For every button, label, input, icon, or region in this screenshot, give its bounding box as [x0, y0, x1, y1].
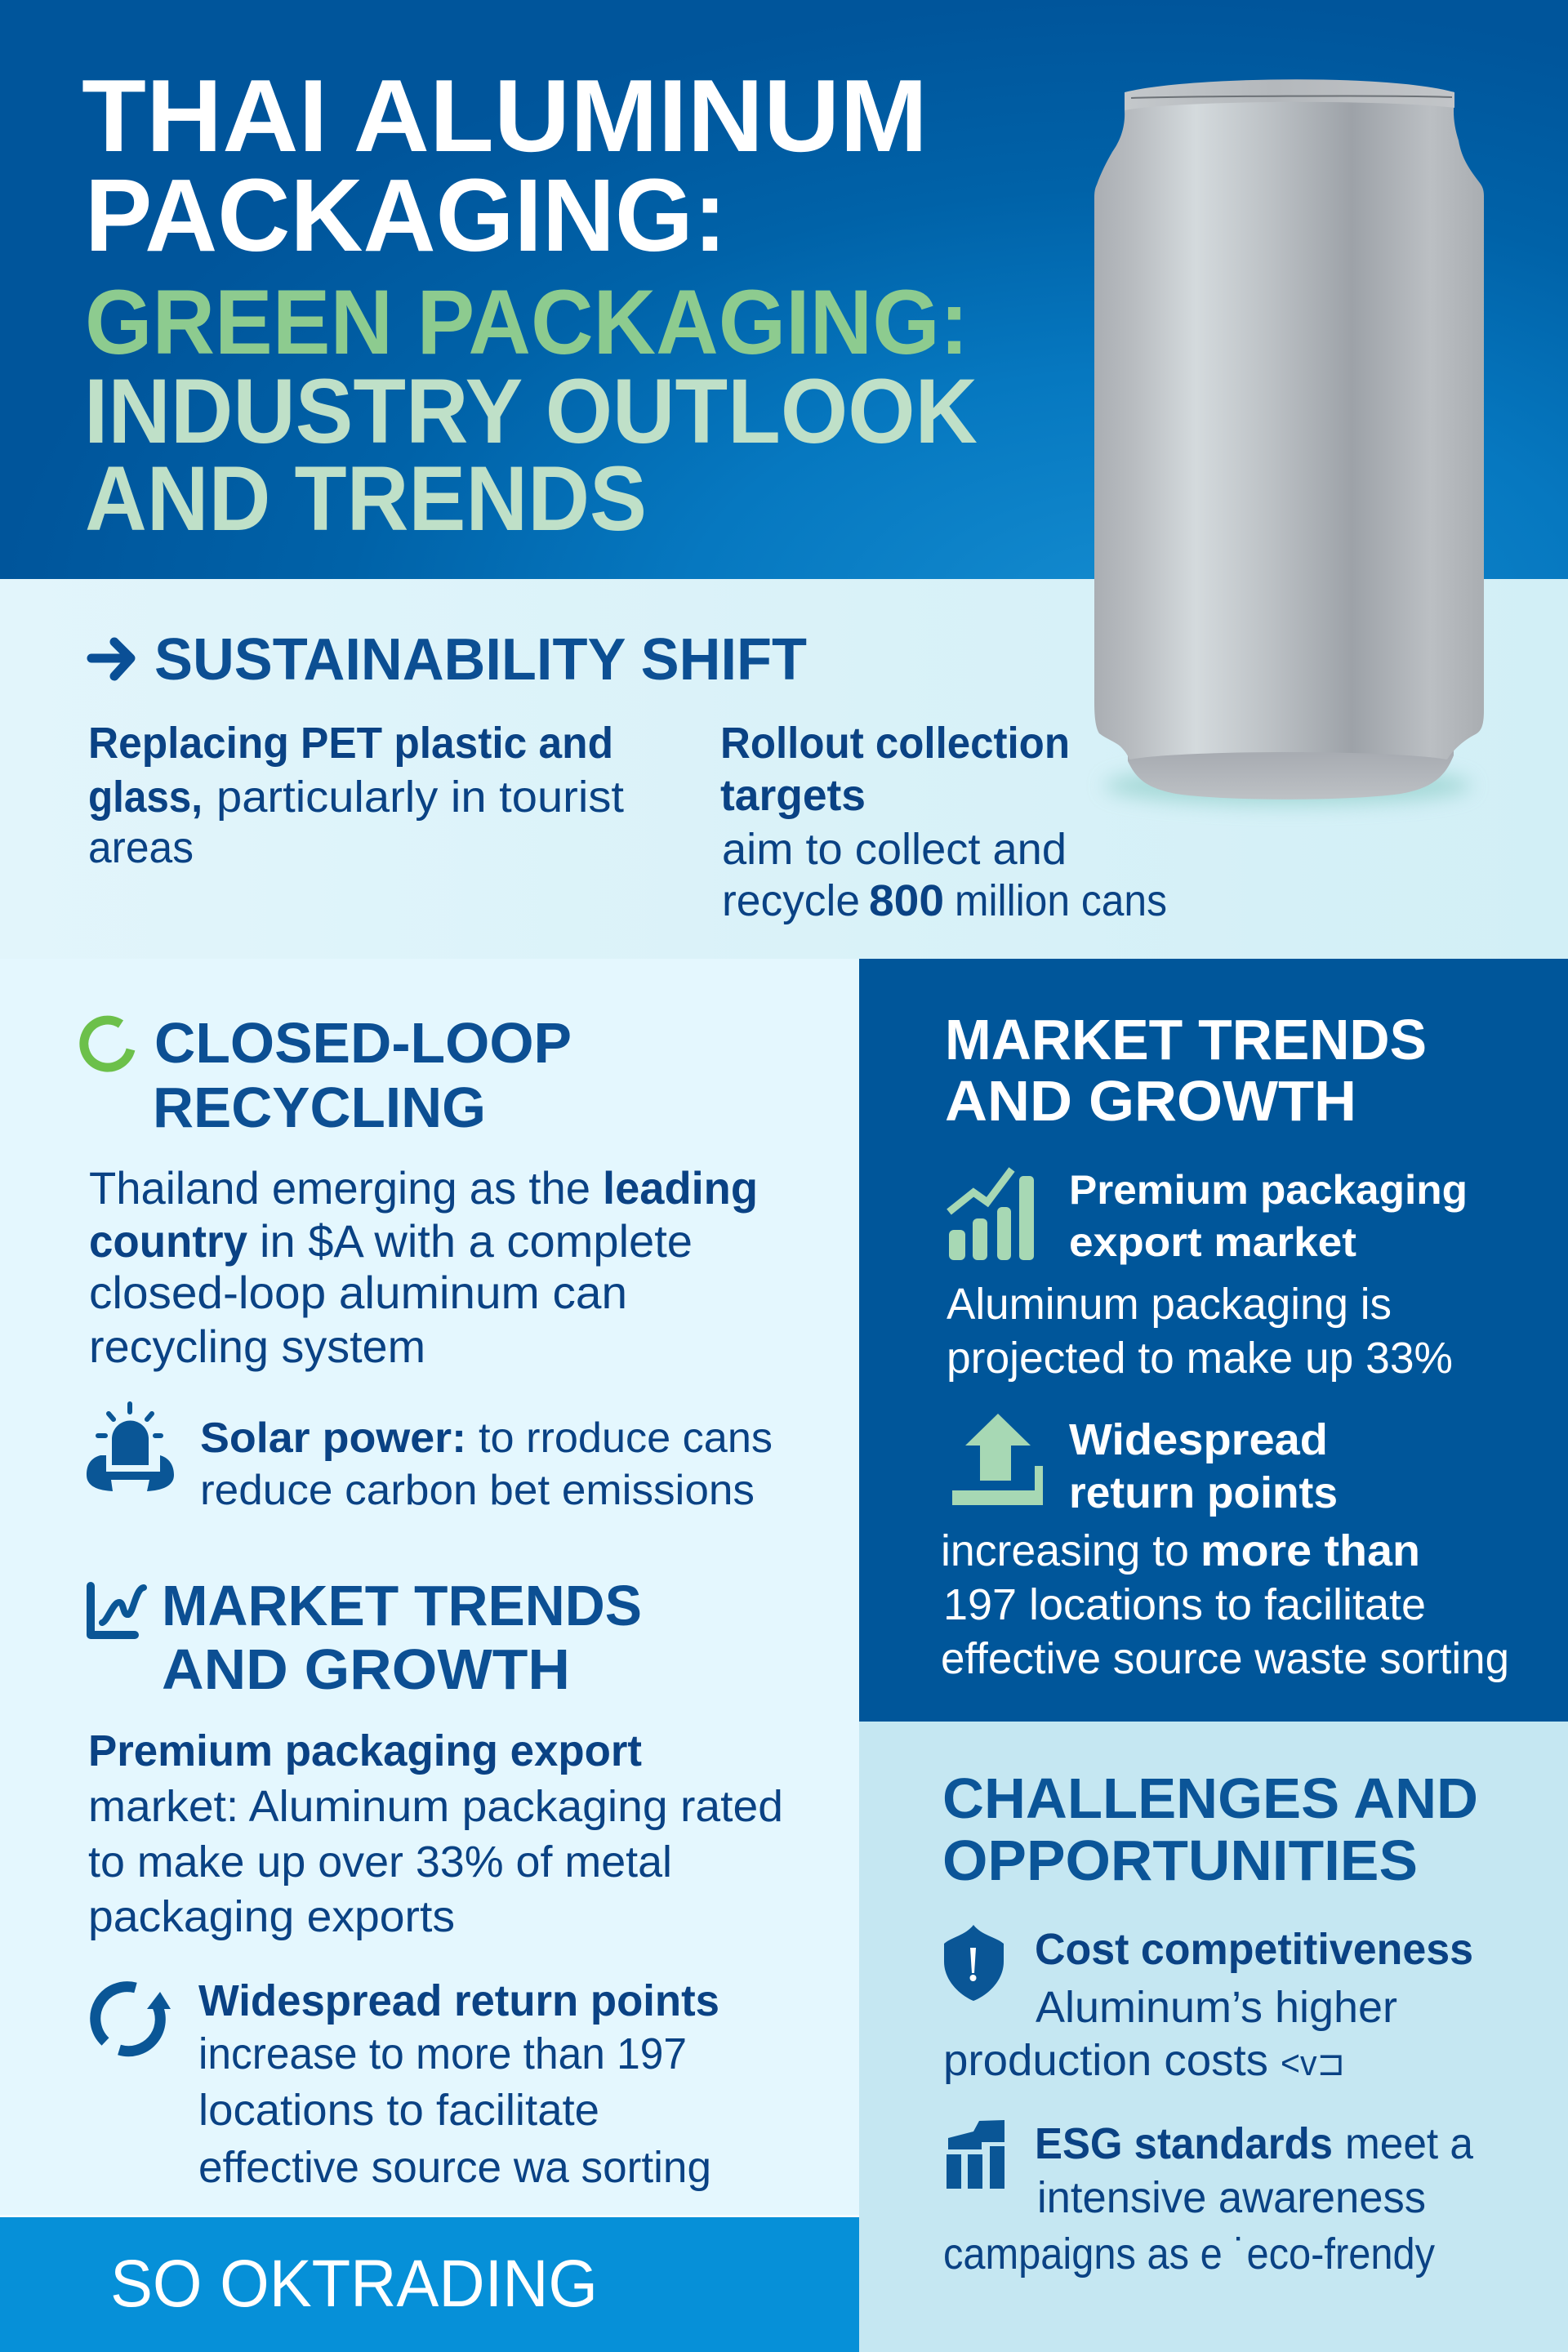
text: rollout collection targets: recycle: [722, 876, 860, 925]
title: GREEN PACKAGING:: [85, 271, 969, 373]
text: replacing PET plastic: [88, 719, 624, 872]
text: widespread return points: [941, 1415, 1509, 1683]
text: ESG standards: intensive awareness: [1037, 2173, 1426, 2222]
text: Thailand leading country: [89, 1162, 758, 1372]
heading: sustainability shift: SUSTAINABILITY SHIFT: [154, 627, 807, 693]
title: THAI ALUMINUM: [82, 58, 928, 173]
text: rollout collection targets: Rollout collection: [720, 719, 1070, 768]
icon: shield alert: [944, 1925, 1004, 2001]
heading: market trends and growth: AND GROWTH: [162, 1637, 570, 1701]
icon: arrow: [91, 642, 131, 676]
heading: challenges and opportunities: [942, 1766, 1478, 1892]
text: cost competitiveness: Cost competitiveness: [1035, 1925, 1473, 1974]
text: ESG standards: meet a: [1345, 2119, 1474, 2168]
panel: sustainability shift: [0, 579, 1568, 959]
text: rollout collection targets: [720, 719, 1167, 925]
text: widespread return points: 197 locations to facilitate: [943, 1580, 1426, 1629]
text: cost competitiveness: Aluminum’s higher: [1036, 1983, 1397, 2032]
heading: market trends: AND GROWTH: [945, 1069, 1356, 1133]
panel: closed-loop and market trends (left): [0, 959, 859, 2217]
text: premium packaging export: market: Aluminum packaging rated: [88, 1782, 783, 1831]
text: Thailand leading country: closed-loop aluminum can: [89, 1267, 627, 1318]
text: solar power: [200, 1414, 773, 1514]
text: widespread return points: increase to more than 197: [198, 2029, 687, 2078]
text: replacing PET plastic: Replacing PET plastic and: [88, 719, 613, 768]
panel: market trends and growth (right): [859, 959, 1568, 1722]
text: widespread return points: effective source wa sorting: [198, 2143, 711, 2192]
text: rollout collection targets: million cans: [955, 876, 1167, 925]
heading: closed-loop recycling: RECYCLING: [153, 1076, 486, 1139]
heading: closed-loop recycling: CLOSED-LOOP: [154, 1011, 572, 1075]
text: premium packaging export market: projected to make up 33%: [947, 1334, 1453, 1383]
text: widespread return points: Widespread return points: [198, 1976, 719, 2025]
text: premium packaging export: to make up over 33% of metal: [88, 1838, 672, 1886]
text: ESG standards: campaigns as e ˙eco-frendy: [943, 2230, 1435, 2278]
text: cost competitiveness: <v⊐: [1281, 2043, 1345, 2083]
image: aluminum can: [1094, 79, 1484, 805]
text: premium packaging export: [88, 1726, 783, 1941]
icon: circular arrows: [96, 1987, 171, 2051]
text: widespread return points: more than: [1200, 1526, 1420, 1575]
heading: market trends: [945, 1008, 1427, 1133]
text: ESG standards: ESG standards: [1035, 2119, 1333, 2168]
text: widespread return points: effective source waste sorting: [941, 1634, 1509, 1683]
heading: challenges and opportunities: OPPORTUNITIES: [942, 1829, 1418, 1892]
text: ESG standards: [943, 2119, 1474, 2278]
panel: header: [0, 0, 1568, 579]
text: widespread return points: locations to facilitate: [198, 2086, 599, 2135]
text: widespread return points: increasing to: [941, 1526, 1189, 1575]
text: rollout collection targets: aim to collect and: [722, 825, 1067, 874]
heading: market trends and growth: MARKET TRENDS: [162, 1574, 642, 1637]
heading: closed-loop recycling: [153, 1011, 572, 1139]
text: brand name: SO OKTRADING: [110, 2247, 598, 2321]
text: Thailand leading country: Thailand emerging as the: [89, 1162, 590, 1214]
text: replacing PET plastic: areas: [88, 823, 194, 872]
text: Thailand leading country: recycling system: [89, 1321, 425, 1372]
text: widespread return points: Widespread: [1069, 1415, 1328, 1464]
panel: challenges and opportunities: [859, 1722, 1568, 2352]
heading: challenges and opportunities: CHALLENGES AND: [942, 1766, 1478, 1830]
title: AND TRENDS: [85, 448, 647, 550]
text: Thailand leading country: leading: [603, 1162, 758, 1214]
icon: ESG bars: [947, 2120, 1004, 2189]
text: rollout collection targets: targets: [720, 771, 866, 820]
title: PACKAGING:: [85, 158, 727, 273]
icon: trend chart: [91, 1586, 144, 1635]
heading: market trends: MARKET TRENDS: [945, 1008, 1427, 1071]
text: solar power: reduce carbon bet emissions: [200, 1467, 755, 1514]
text: premium packaging export market: Premium packaging: [1069, 1167, 1468, 1213]
text: replacing PET plastic: particularly in tourist: [216, 773, 624, 822]
title: [82, 58, 978, 550]
text: premium packaging export: packaging exports: [88, 1892, 455, 1941]
text: Thailand leading country: in $A with a complete: [260, 1215, 693, 1267]
panel: footer brand: [0, 2215, 859, 2352]
text: premium packaging export: Premium packaging export: [88, 1726, 642, 1775]
icon: bar chart with trend line: [949, 1169, 1034, 1260]
icon: green recycling ring: [84, 1020, 131, 1067]
text: cost competitiveness: production costs: [943, 2036, 1268, 2085]
text: widespread return points: return points: [1069, 1468, 1338, 1517]
icon: upload arrow: [952, 1414, 1043, 1505]
text: solar power: to rroduce cans: [479, 1414, 773, 1462]
text: premium packaging export market: Aluminum packaging is: [947, 1280, 1392, 1329]
text: widespread return points: [198, 1976, 719, 2192]
text: premium packaging export market: [947, 1167, 1468, 1383]
text: solar power: Solar power:: [200, 1414, 466, 1462]
text: replacing PET plastic: glass,: [88, 773, 203, 822]
text: cost competitiveness: [943, 1925, 1473, 2085]
heading: market trends and growth: [162, 1574, 642, 1701]
title: INDUSTRY OUTLOOK: [84, 360, 978, 462]
text: rollout collection targets: 800: [869, 876, 944, 925]
text: Thailand leading country: country: [89, 1215, 247, 1267]
icon: solar power: [87, 1404, 174, 1491]
text: premium packaging export market: export market: [1069, 1219, 1356, 1265]
